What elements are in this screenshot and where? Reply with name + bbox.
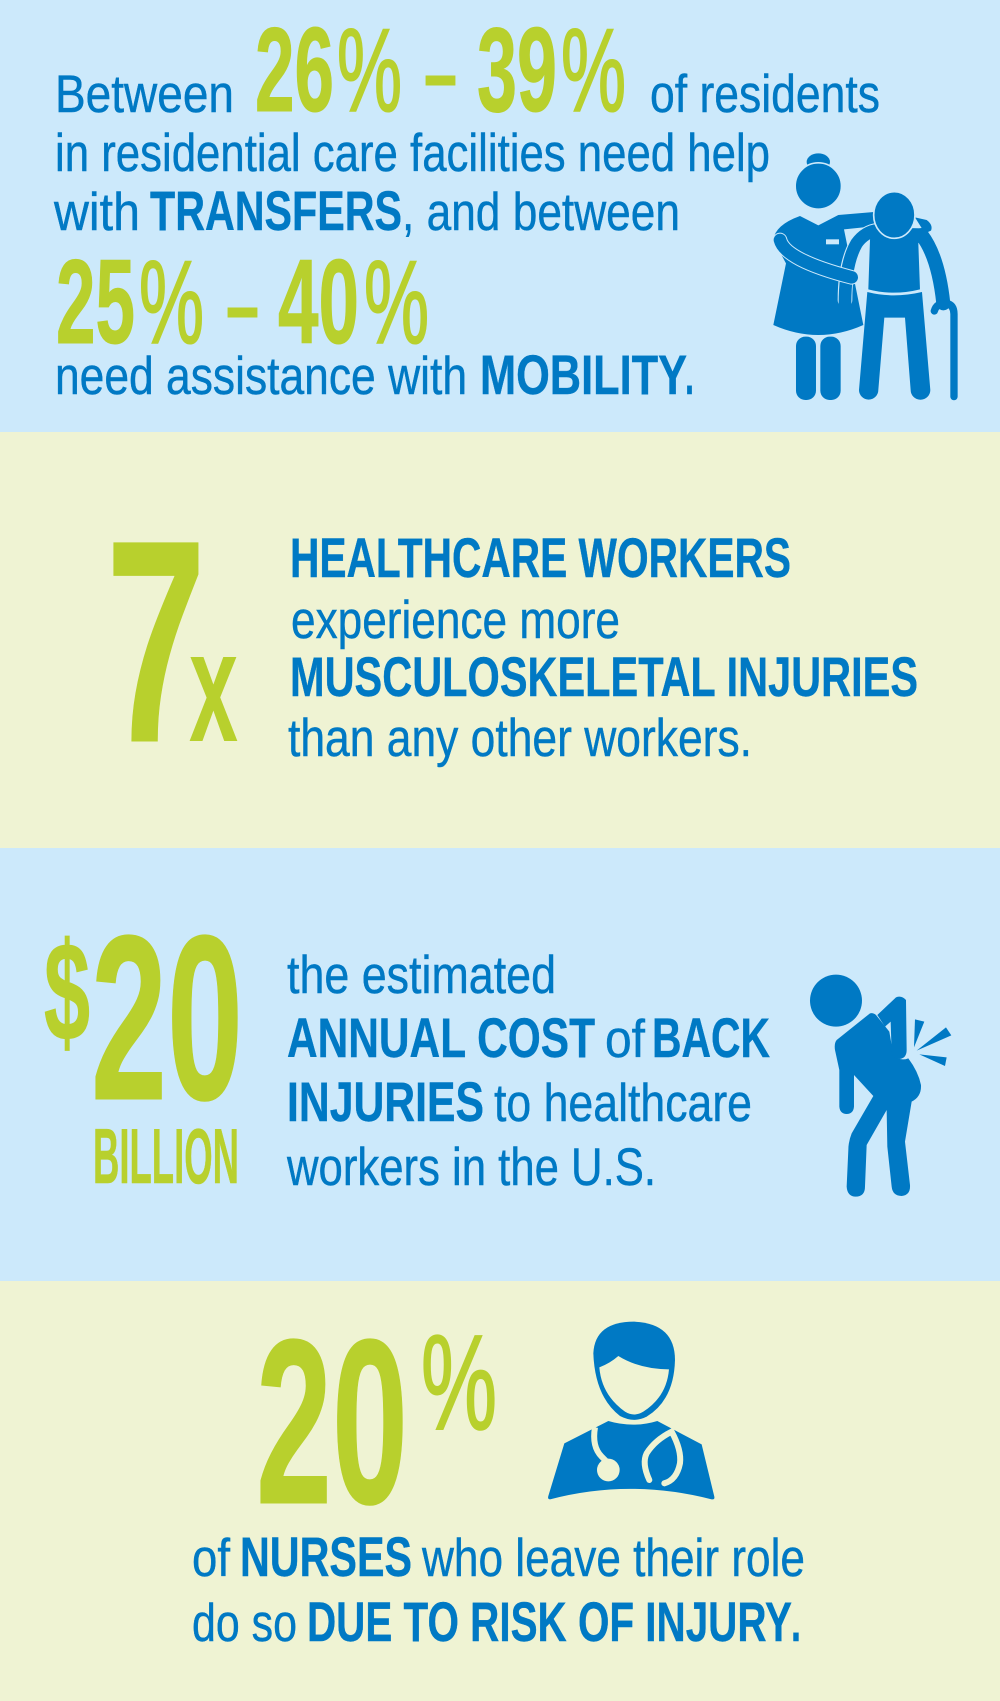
text: annual cost of back injuries: the estimated — [287, 946, 556, 1005]
stat: 20%: % — [421, 1307, 497, 1458]
text: nurses who leave due to risk of injury: of — [192, 1529, 230, 1588]
text: between 26% to 39% of residents: – — [426, 3, 455, 137]
stat: $20 billion — [44, 886, 243, 1200]
text: nurses who leave due to risk of injury: DUE TO RISK OF INJURY — [307, 1590, 792, 1653]
text: healthcare workers: experience more — [291, 591, 620, 650]
text: nurses who leave due to risk of injury: do so — [192, 1594, 297, 1653]
text: healthcare workers: HEALTHCARE WORKERS — [290, 526, 791, 589]
text: assistance with mobility: MOBILITY — [480, 343, 687, 406]
text: between 26% to 39% of residents: of residents — [650, 65, 880, 124]
panel: 20% of nurses — [0, 1281, 1000, 1701]
text: between 26% to 39% of residents: % — [561, 5, 626, 137]
text: annual cost of back injuries: of — [605, 1010, 645, 1069]
stat: 25% to 40%: % — [139, 237, 204, 369]
text: healthcare workers — [288, 526, 918, 768]
panel: residents statistics — [0, 0, 1000, 432]
text: nurses who leave due to risk of injury: . — [791, 1590, 801, 1653]
text: assistance with mobility: . — [685, 343, 694, 406]
text: between 26% to 39% of residents: Between — [55, 65, 234, 124]
stat: 25% to 40%: 40 — [278, 235, 359, 369]
text: with transfers: , and between — [402, 183, 680, 242]
icon: doctor with stethoscope — [548, 1322, 714, 1499]
text: healthcare workers: than any other workers. — [288, 709, 752, 768]
text: nurses who leave due to risk of injury — [192, 1525, 805, 1653]
stat: 25% to 40%: % — [364, 237, 429, 369]
text: with transfers — [53, 179, 680, 242]
stat: 25% to 40%: – — [228, 235, 257, 369]
text: annual cost of back injuries: INJURIES — [287, 1070, 484, 1133]
text: with transfers: TRANSFERS — [150, 179, 402, 242]
text: annual cost of back injuries: BACK — [652, 1006, 770, 1069]
text: annual cost of back injuries: ANNUAL COST — [287, 1006, 595, 1069]
stat: 7x: 7 — [106, 481, 206, 803]
panel: $20 billion annual cost: BILLION — [93, 1112, 239, 1200]
stat: 20%: 20 — [256, 1290, 408, 1553]
stat: 25% to 40% — [56, 235, 429, 369]
text: nurses who leave due to risk of injury: NURSES — [240, 1525, 412, 1588]
text: between 26% to 39% of residents: 26 — [255, 3, 334, 137]
text: nurses who leave due to risk of injury: who leave their role — [421, 1529, 805, 1588]
stat: 7x: x — [189, 597, 238, 775]
stat: $20 billion: $ — [44, 913, 90, 1070]
text: with transfers: with — [53, 183, 140, 242]
text: annual cost of back injuries — [286, 946, 770, 1197]
stat: 25% to 40%: 25 — [56, 235, 135, 369]
text: annual cost of back injuries: to healthcare — [494, 1074, 752, 1133]
text: assistance with mobility: need assistance with — [55, 347, 467, 406]
text: annual cost of back injuries: workers in the U.S. — [286, 1138, 656, 1197]
panel: $20 billion annual cost — [0, 848, 1000, 1281]
text: residential care facilities: in residential care facilities need help — [55, 124, 770, 183]
icon: nurse helping elderly man with cane — [773, 153, 954, 400]
text: between 26% to 39% of residents — [55, 3, 880, 137]
text: between 26% to 39% of residents: % — [337, 5, 402, 137]
panel: 7x musculoskeletal injuries — [0, 432, 1000, 848]
icon: person with back pain — [810, 975, 951, 1197]
stat: $20 billion: 20 — [91, 886, 243, 1149]
text: between 26% to 39% of residents: 39 — [477, 3, 557, 137]
